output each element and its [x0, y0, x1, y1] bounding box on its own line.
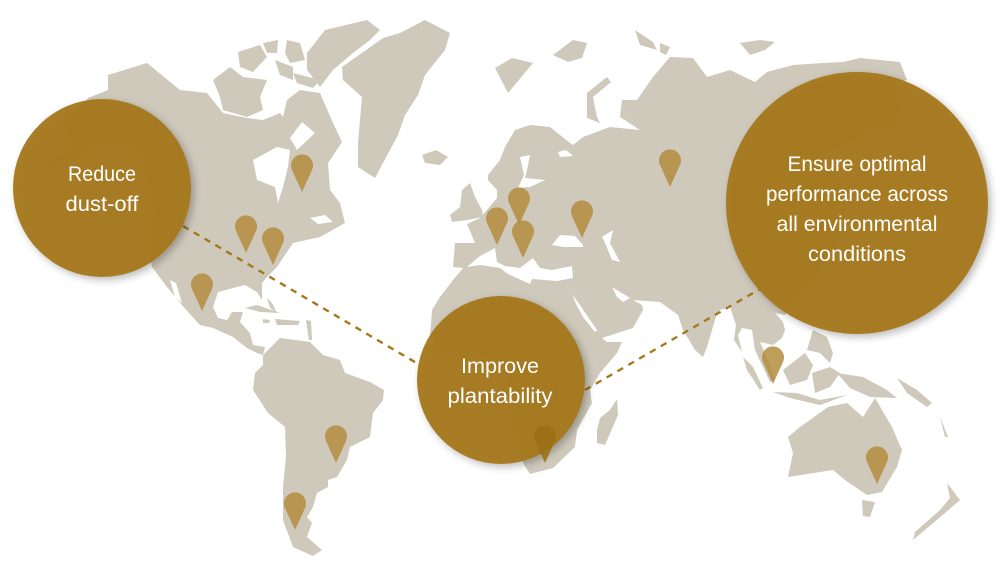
pin: Italy: [512, 220, 534, 258]
dashed connector: Reduce dust-off to Improve plantability: [183, 226, 420, 365]
map pins: [191, 149, 888, 530]
pin: Brazil: [325, 425, 347, 463]
water bodies: [170, 122, 630, 332]
callout: Reduce dust-off: [13, 99, 191, 277]
North America: [33, 20, 380, 355]
pin: France: [486, 207, 508, 245]
callout: Ensure optimal performance: [726, 72, 988, 334]
pin: US central: [235, 215, 257, 253]
UK and Ireland: [450, 183, 483, 222]
callout: Improve plantability: Improve: [461, 355, 539, 378]
callout: Improve plantability: [417, 296, 585, 464]
Eurasia and Africa: [430, 57, 907, 474]
pin: Russia: [659, 149, 681, 187]
callout: Ensure optimal performance: all environmental: [776, 213, 938, 236]
Tasmania: [862, 500, 875, 517]
pin: Argentina: [284, 492, 306, 530]
dashed connector: Improve plantability to Ensure optimal performance: [585, 289, 760, 390]
pin: South Africa: [534, 425, 556, 463]
pin: Canada: [291, 154, 313, 192]
callout: Ensure optimal performance: performance across: [766, 183, 948, 206]
callout: Reduce dust-off: dust-off: [66, 193, 139, 216]
Australia: [788, 398, 902, 495]
callout: Improve plantability: plantability: [448, 385, 553, 408]
pin: Ukraine: [571, 200, 593, 238]
pin: Indonesia: [762, 346, 784, 384]
Southeast Asia islands: [743, 330, 948, 437]
pin: Mexico: [191, 273, 213, 311]
callout: Ensure optimal performance: conditions: [808, 243, 906, 266]
pin: Australia: [866, 446, 888, 484]
callout: Reduce dust-off: Reduce: [68, 163, 136, 186]
Arctic islands: [495, 30, 775, 123]
pin: US east: [262, 227, 284, 265]
Madagascar: [597, 399, 618, 445]
Iceland: [422, 150, 448, 165]
Greenland: [342, 20, 450, 178]
pin: Germany: [508, 187, 530, 225]
South America: [253, 338, 384, 556]
callout: Ensure optimal performance: Ensure optimal: [788, 153, 926, 176]
New Zealand: [913, 483, 960, 540]
